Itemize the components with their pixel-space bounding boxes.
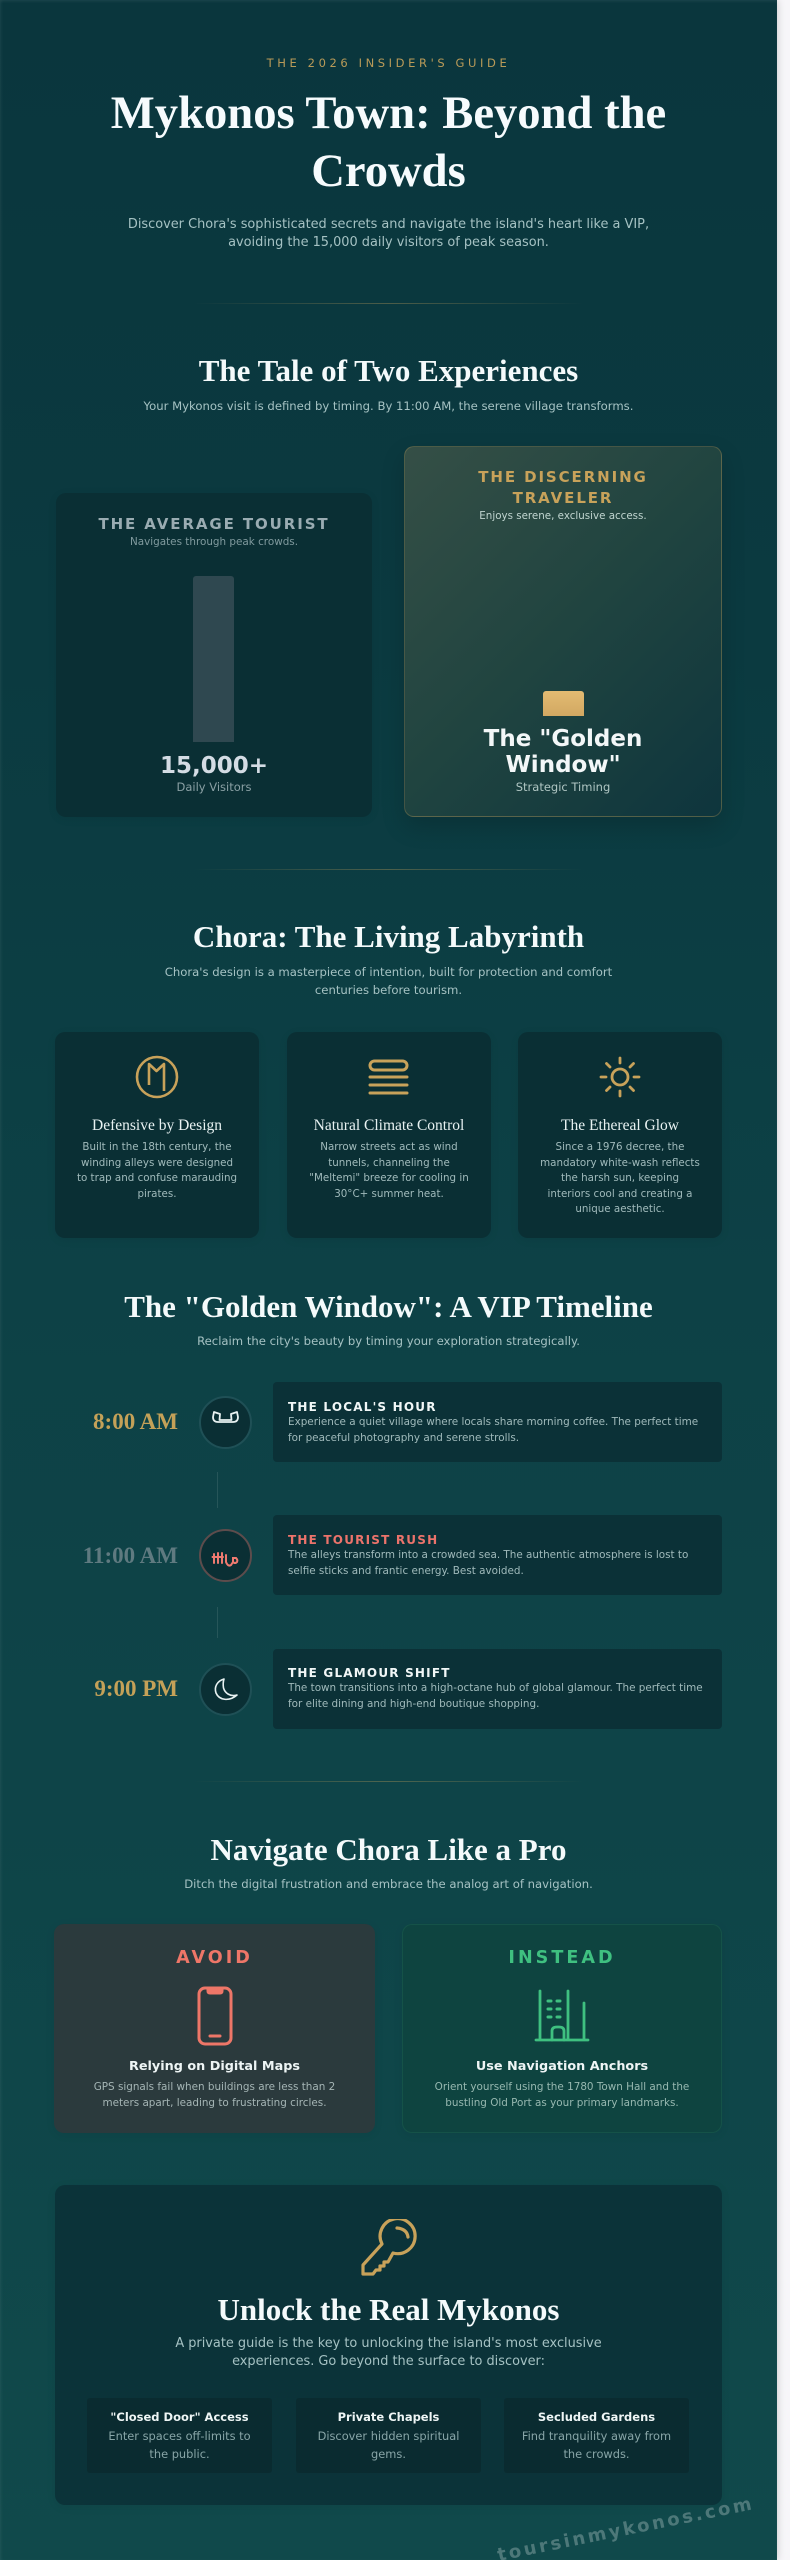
card text: pirates. [138,1188,176,1200]
discerning traveler note: Enjoys serene, exclusive access. [479,510,647,522]
heading: unlock: Unlock the Real Mykonos [218,2292,559,2327]
card text: Narrow streets act as wind [320,1141,458,1153]
step text [288,1682,703,1710]
mini title: Secluded Gardens [538,2410,655,2424]
card text: mandatory white-wash reflects [540,1157,700,1169]
panel: instead [402,1924,722,2133]
timeline card: tourist rush [273,1515,722,1595]
card text [77,1141,237,1200]
step text: for peaceful photography and serene strolls. [288,1432,519,1444]
intro: unlock: A private guide is the key to unlocking the island's most exclusive [175,2336,602,2351]
icon: key [361,2219,417,2276]
card text: Built in the 18th century, the [82,1141,232,1153]
intro: unlock: experiences. Go beyond the surface to discover: [232,2354,545,2369]
card text: 30°C+ summer heat. [334,1188,444,1200]
heading: chora: Chora: The Living Labyrinth [193,919,584,954]
step text: selfie sticks and frantic energy. Best avoided. [288,1565,524,1577]
icon: labyrinth m [136,1056,178,1098]
heading: timeline: The "Golden Window": A VIP Timeline [124,1289,653,1324]
visitor count: 15,000+ [160,753,268,779]
mini text: the public. [149,2447,210,2461]
step text: The town transitions into a high-octane hub of global glamour. The perfect time [288,1682,703,1694]
card text: "Meltemi" breeze for cooling in [309,1172,469,1184]
mini text: the crowds. [563,2447,630,2461]
timeline node: coffee [199,1396,252,1449]
timeline card: local's hour [273,1382,722,1462]
avoid text: meters apart, leading to frustrating circles. [102,2097,327,2109]
avoid text [94,2081,335,2109]
icon: town hall [534,1990,590,2042]
card text: the harsh sun, keeping [561,1172,679,1184]
golden bar [543,691,584,716]
subtitle [128,217,649,250]
time: 9 pm: 9:00 PM [94,1676,178,1701]
avoid label: AVOID [176,1948,253,1968]
avoid title: Relying on Digital Maps [129,2059,300,2074]
panel: average tourist [56,493,372,817]
mini text: Discover hidden spiritual [318,2429,459,2443]
timeline node: crowd [199,1529,252,1582]
intro: chora [165,965,612,997]
golden window heading [484,726,642,778]
instead label: INSTEAD [508,1948,616,1968]
card title: Defensive by Design [92,1117,222,1134]
discerning traveler label: THE DISCERNING [478,468,648,486]
step title: THE TOURIST RUSH [288,1533,438,1547]
step text: for elite dining and high-end boutique shopping. [288,1698,539,1710]
eyebrow: THE 2026 INSIDER'S GUIDE [267,56,510,70]
instead text: bustling Old Port as your primary landmarks. [445,2097,679,2109]
intro: timeline: Reclaim the city's beauty by timing your exploration strategically. [197,1334,580,1348]
panel: avoid [54,1924,375,2133]
mini card: closed door access [87,2398,272,2473]
mini text [522,2429,671,2461]
card text: winding alleys were designed [81,1157,233,1169]
instead text [435,2081,689,2109]
average tourist note: Navigates through peak crowds. [130,536,298,548]
mini text [318,2429,459,2461]
title [111,87,666,197]
mini title: "Closed Door" Access [110,2410,249,2424]
title: Mykonos Town: Beyond the [111,87,666,139]
intro: chora: centuries before tourism. [315,983,462,997]
step text [288,1416,698,1444]
crowd bar [193,576,234,742]
step text: Experience a quiet village where locals share morning coffee. The perfect time [288,1416,698,1428]
time: 11 am: 11:00 AM [83,1543,178,1568]
step title: THE LOCAL'S HOUR [288,1400,437,1414]
mini card: private chapels [296,2398,481,2473]
time: 8 am: 8:00 AM [93,1409,178,1434]
title: Crowds [311,145,466,197]
card title: Natural Climate Control [314,1117,464,1134]
panel: defensive by design [55,1032,259,1238]
card text: interiors cool and creating a [548,1188,692,1200]
intro: navigate: Ditch the digital frustration and embrace the analog art of navigation. [184,1877,593,1891]
panel: unlock [55,2185,722,2505]
card text [540,1141,700,1215]
visitor caption: Daily Visitors [176,780,252,794]
icon: moon [214,1678,238,1700]
icon: coffee [212,1411,239,1423]
panel: ethereal glow [518,1032,722,1238]
step title: THE GLAMOUR SHIFT [288,1666,451,1680]
avoid text: GPS signals fail when buildings are less than 2 [94,2081,335,2093]
card title: The Ethereal Glow [561,1117,679,1134]
discerning traveler label: TRAVELER [513,489,613,507]
heading: tale of two experiences: The Tale of Two Experiences [199,353,578,388]
mini text [108,2429,251,2461]
mini text: gems. [371,2447,406,2461]
instead text: Orient yourself using the 1780 Town Hall and the [435,2081,689,2093]
intro: chora: Chora's design is a masterpiece of intention, built for protection and comfort [165,965,612,979]
average tourist label: THE AVERAGE TOURIST [98,515,330,533]
intro: unlock [175,2336,602,2369]
subtitle: Discover Chora's sophisticated secrets and navigate the island's heart like a VIP, [128,217,649,232]
step text: The alleys transform into a crowded sea. The authentic atmosphere is lost to [288,1549,688,1561]
subtitle: avoiding the 15,000 daily visitors of peak season. [228,235,549,250]
icon: wind bars [368,1060,408,1094]
mini text: Enter spaces off-limits to [108,2429,251,2443]
panel: natural climate control [287,1032,491,1238]
discerning traveler label [478,468,648,507]
golden window heading: The "Golden [484,726,642,752]
mini title: Private Chapels [338,2410,439,2424]
mini card: secluded gardens [504,2398,689,2473]
icon: phone [198,1986,232,2046]
card text: tunnels, channeling the [328,1157,450,1169]
card text: to trap and confuse marauding [77,1172,237,1184]
golden window heading: Window" [505,752,621,778]
timeline node: moon [199,1663,252,1716]
instead title: Use Navigation Anchors [476,2059,648,2074]
intro: tale of two experiences: Your Mykonos visit is defined by timing. By 11:00 AM, the serene village transforms. [144,399,633,413]
panel: discerning traveler [404,446,722,817]
mini text: Find tranquility away from [522,2429,671,2443]
icon: crowd [212,1552,238,1567]
heading: navigate: Navigate Chora Like a Pro [211,1832,566,1867]
step text [288,1549,688,1577]
timeline card: glamour shift [273,1649,722,1729]
card text: unique aesthetic. [575,1203,665,1215]
card text [309,1141,469,1200]
card text: Since a 1976 decree, the [556,1141,684,1153]
icon: sun [600,1056,640,1098]
golden window caption: Strategic Timing [516,780,610,794]
